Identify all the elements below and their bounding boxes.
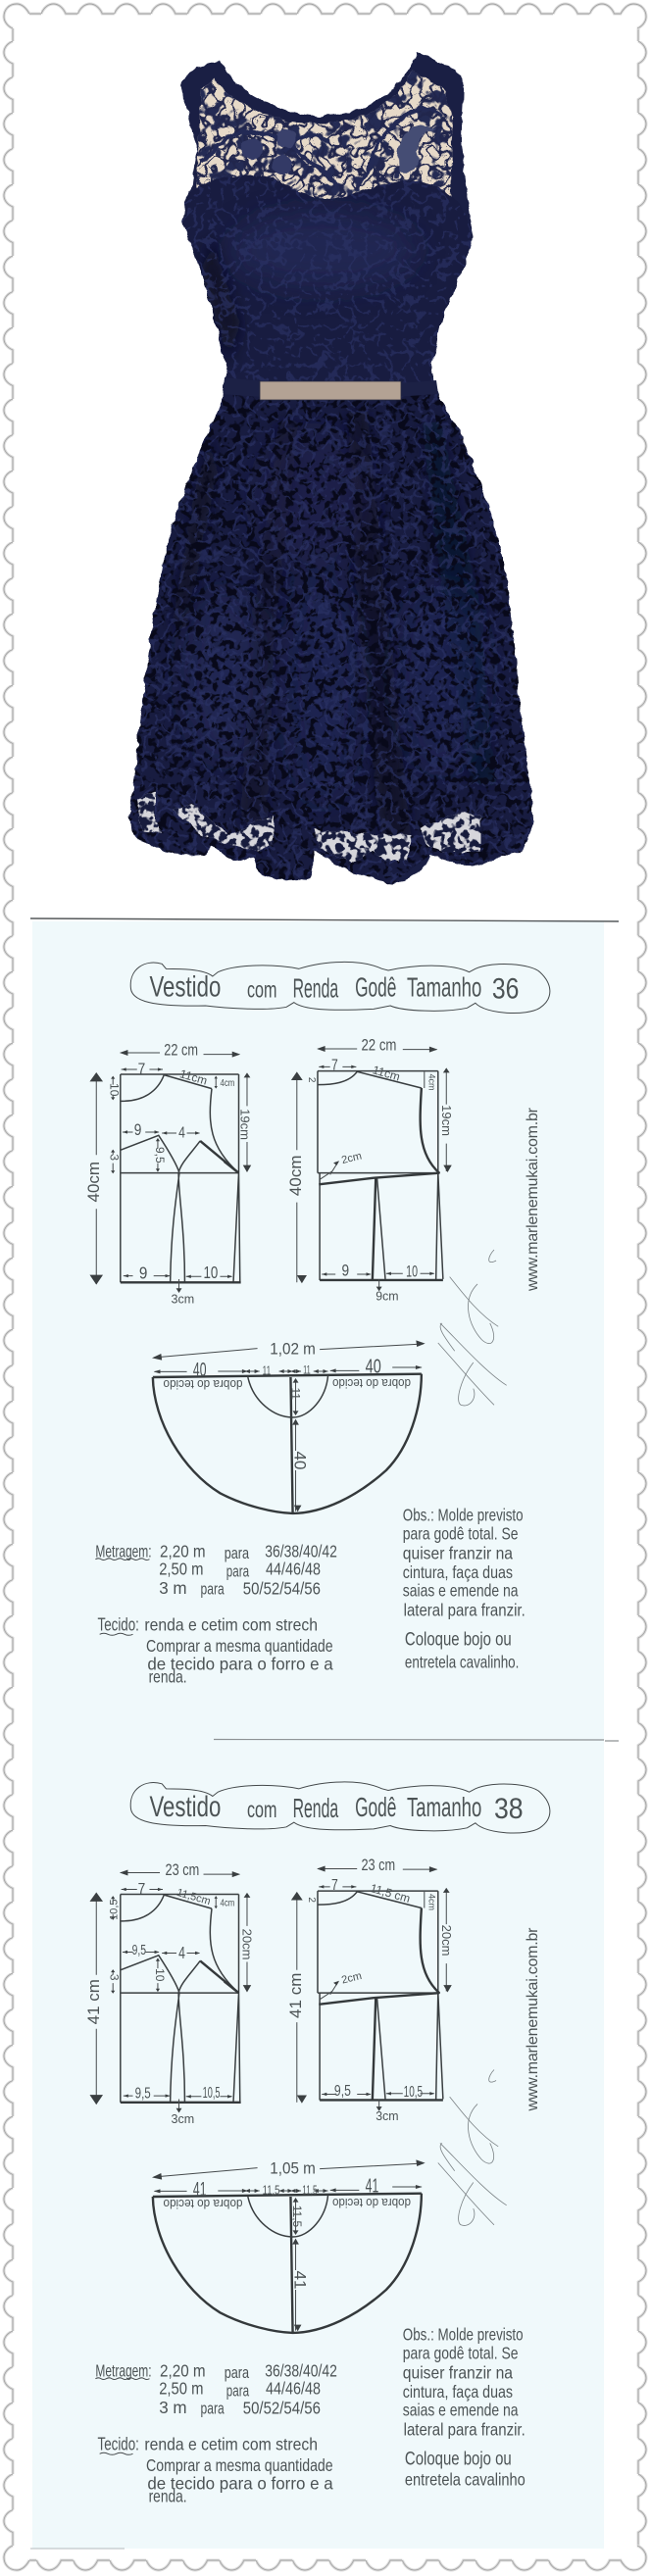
measurement labels: 9 [342, 1263, 349, 1280]
rotated labels: 10,5 [108, 1899, 120, 1920]
heading: title: Godê [355, 1792, 396, 1822]
panel: pattern size 36 [30, 918, 619, 1687]
gold metal plate [260, 381, 401, 400]
text block: observations: saias e emende na [403, 1581, 519, 1601]
text block: metragem: para [201, 2401, 225, 2418]
rotated labels: 2cm [340, 1970, 363, 1987]
skirt measurements: 41 [193, 2178, 206, 2200]
rotated skirt labels: dobra do tecido [163, 2197, 243, 2211]
pattern lines, title cloud, signature [89, 1782, 550, 2225]
measurement labels: 3cm [171, 2111, 194, 2126]
rotated labels: 19cm [237, 1109, 253, 1140]
panel: pattern size 38 [30, 1739, 619, 2549]
text block: metragem: 36/38/40/42 [265, 2361, 337, 2381]
rotated labels [84, 1063, 454, 1202]
drafting diagrams: bodice front and back [84, 962, 550, 1406]
rotated labels [84, 1881, 454, 2024]
drafting diagrams: bodice front and back: 10,5 [404, 2082, 423, 2101]
sheer lace yoke [196, 71, 453, 199]
text block: observations: Obs.: Molde previsto [403, 2325, 524, 2345]
heading: title: 38 [494, 1793, 524, 1825]
skirt measurements: 11,5 [302, 2184, 318, 2198]
lace thread texture [123, 167, 539, 887]
measurement labels: 4cm [220, 1899, 234, 1908]
measurement labels: 23 cm [361, 1857, 395, 1875]
heading: title: Tamanho [407, 1792, 481, 1822]
skirt diagram and notes [95, 2159, 526, 2506]
measurement labels: 7 [331, 1876, 338, 1893]
measurement labels: 7 [138, 1061, 145, 1077]
measurement labels: 10,5 [203, 2084, 220, 2101]
text block: tecido [98, 1614, 333, 1687]
text block: metragem: para [225, 2364, 249, 2382]
rotated labels: 2 [306, 1897, 317, 1903]
heading: title [149, 971, 519, 1005]
skirt measurements [193, 2159, 378, 2200]
text block: metragem: 44/46/48 [266, 1560, 321, 1579]
text block: observations [403, 1506, 526, 1672]
text block: metragem: 3 m [159, 1578, 187, 1598]
text block: metragem: 2,20 m [160, 1542, 206, 1561]
text block: metragem: 2,50 m [159, 1560, 204, 1579]
rotated skirt labels: dobra do tecido [332, 1376, 411, 1391]
rotated labels: 11,5 cm [369, 1881, 412, 1906]
text block: observations: saias e emende na [403, 2401, 519, 2420]
measurement labels: 9,5 [135, 2084, 151, 2102]
measurement labels: 3cm [376, 2110, 399, 2124]
text block: metragem: 3 m [159, 2398, 187, 2417]
rotated skirt labels: dobra do tecido [163, 1377, 243, 1392]
text block: metragem: para [226, 1562, 249, 1581]
measurement labels: 7 [138, 1880, 145, 1898]
skirt measurements: 11 [303, 1363, 311, 1376]
rotated skirt labels: 40 [290, 1452, 309, 1469]
heading: title: Renda [293, 1792, 338, 1823]
rotated labels: 11cm [178, 1066, 209, 1088]
rotated skirt labels: 41 [290, 2271, 309, 2289]
text block: tecido: Comprar a mesma quantidade [146, 1637, 333, 1656]
skirt folds [172, 235, 495, 863]
website address: www.marlenemukai.com.br [525, 1107, 541, 1292]
text block: metragem: 36/38/40/42 [265, 1542, 337, 1561]
heading: title [149, 1792, 524, 1825]
measurement labels: 9cm [376, 1290, 399, 1304]
rotated labels: 10 [153, 1968, 167, 1982]
text block: tecido: renda e cetim com strech [144, 1615, 318, 1635]
text block: metragem: Metragem: [95, 2361, 152, 2381]
measurement labels: 7 [331, 1056, 338, 1073]
rotated labels: 4cm [427, 1894, 437, 1910]
measurement labels: 9 [134, 1121, 141, 1139]
skirt measurements: 11,5 [263, 2184, 279, 2198]
heading: title: com [247, 1797, 276, 1822]
text block: tecido: renda e cetim com strech [144, 2435, 318, 2454]
middle separator line [214, 1739, 619, 1741]
godet skirt pattern [95, 1340, 426, 1635]
text block: observations: lateral para franzir. [404, 2420, 526, 2440]
rotated skirt labels [163, 2196, 411, 2289]
heading: title: Tamanho [407, 971, 481, 1003]
text block: metragem: 2,20 m [160, 2361, 206, 2381]
text block: observations: entretela cavalinho [405, 2470, 526, 2490]
photo: navy lace dress [123, 49, 539, 887]
text block: tecido: Tecido: [98, 1614, 139, 1635]
rotated labels: 41 cm [286, 1973, 305, 2018]
text block: tecido: de tecido para o forro e a [147, 1655, 333, 1674]
godet skirt pattern [95, 2159, 426, 2454]
text block: observations: quiser franzir na [403, 2364, 514, 2383]
drafting diagrams: bodice front and back [84, 1782, 550, 2225]
measurement labels [132, 1857, 423, 2126]
rotated labels: 11,5cm [175, 1887, 212, 1907]
text block: tecido: de tecido para o forro e a [147, 2474, 333, 2494]
rotated labels: 40cm [84, 1162, 103, 1202]
skirt diagram and notes: 41 [366, 2174, 378, 2197]
skirt measurements: 40 [366, 1355, 381, 1377]
bottom paper edge [30, 2548, 125, 2550]
heading: title: Vestido [149, 971, 221, 1004]
heading: title: com [247, 976, 276, 1003]
text block: metragem: 50/52/54/56 [243, 1579, 321, 1599]
text block: tecido [98, 2434, 333, 2506]
rotated skirt labels: dobra do tecido [332, 2196, 411, 2210]
skirt measurements [193, 1340, 381, 1380]
rotated labels: 19cm [439, 1105, 454, 1136]
pattern lines, title cloud, signature [89, 962, 550, 1406]
text block: metragem: 2,50 m [159, 2379, 204, 2399]
text block: metragem: 50/52/54/56 [243, 2399, 321, 2418]
rotated labels: 9,5 [153, 1147, 167, 1164]
skirt measurements: 1,02 m [270, 1340, 316, 1359]
heading: title: Renda [293, 972, 338, 1003]
text block: observations: para godê total. Se [403, 1525, 519, 1544]
text block: tecido: Comprar a mesma quantidade [146, 2456, 333, 2475]
text block: observations: Obs.: Molde previsto [403, 1506, 524, 1525]
text block: metragem: para [201, 1581, 225, 1599]
sheer hem scallops [137, 792, 482, 863]
rotated labels: 2cm [340, 1150, 363, 1166]
skirt measurements: 11 [263, 1363, 271, 1378]
text block: tecido: renda. [149, 2488, 187, 2506]
measurement labels: 9,5 [334, 2081, 351, 2100]
text block: observations: Coloque bojo ou [405, 2448, 512, 2469]
rotated labels: 3 [108, 1154, 122, 1161]
lace bodice and skirt [123, 167, 539, 887]
rotated labels: 10 [108, 1083, 122, 1097]
measurement labels: 4 [178, 1944, 185, 1962]
text block: metragem: para [225, 1545, 249, 1562]
text block: observations: para godê total. Se [403, 2345, 519, 2363]
rotated labels: 41 cm [84, 1979, 103, 2024]
measurement labels: 3cm [171, 1292, 194, 1307]
heading: title: Vestido [149, 1792, 221, 1823]
measurement labels: 4 [178, 1124, 185, 1141]
text block: metragem [95, 2361, 337, 2418]
text block: tecido: renda. [149, 1668, 187, 1687]
text block: metragem: para [226, 2382, 249, 2401]
skirt measurements: 1,05 m [270, 2159, 316, 2178]
heading: title: 36 [492, 972, 519, 1005]
text block: observations: lateral para franzir. [404, 1601, 526, 1620]
skirt measurements: 40 [193, 1359, 206, 1380]
measurement labels: 23 cm [166, 1861, 199, 1880]
skirt diagram and notes [95, 1340, 526, 1687]
rotated labels: 20cm [439, 1925, 454, 1956]
rotated labels: 40cm [286, 1156, 305, 1196]
lace holes texture [123, 392, 539, 887]
text block: metragem [95, 1542, 337, 1599]
belt band [224, 377, 438, 398]
highlight patches [184, 213, 485, 804]
text block: observations: quiser franzir na [403, 1545, 514, 1563]
rotated labels: 11cm [371, 1063, 402, 1084]
rotated skirt labels [163, 1376, 411, 1469]
measurement labels: 4cm [220, 1078, 234, 1089]
rotated labels: 2 [306, 1077, 317, 1083]
text block: observations [403, 2325, 526, 2490]
text block: metragem: 44/46/48 [266, 2379, 321, 2399]
measurement labels: 10 [204, 1263, 218, 1282]
text block: metragem: Metragem: [95, 1542, 152, 1561]
rotated skirt labels: 11 [289, 1387, 303, 1400]
measurement labels: 9 [139, 1264, 147, 1283]
text block: observations: entretela cavalinho. [405, 1654, 519, 1672]
text block: observations: cintura, faça duas [403, 2383, 513, 2402]
measurement labels: 9,5 [132, 1942, 146, 1957]
top separator line [30, 918, 619, 921]
text block: observations: cintura, faça duas [403, 1563, 513, 1582]
measurement labels [134, 1037, 418, 1307]
measurement labels: 22 cm [361, 1037, 396, 1055]
dress silhouette [123, 49, 539, 887]
heading: title: Godê [355, 971, 396, 1003]
website address: www.marlenemukai.com.br [525, 1927, 541, 2111]
text block: tecido: Tecido: [98, 2434, 139, 2454]
rotated labels: 20cm [239, 1929, 255, 1959]
measurement labels: 22 cm [164, 1042, 198, 1060]
text block: observations: Coloque bojo ou [405, 1628, 512, 1650]
rotated labels: 4cm [427, 1073, 437, 1091]
rotated skirt labels: 11,5 [290, 2205, 304, 2228]
rotated labels: 3 [108, 1974, 122, 1981]
measurement labels: 10 [406, 1263, 418, 1281]
lace fabric of the dress [123, 49, 539, 887]
panel: pale blue pattern paper [32, 921, 604, 2549]
